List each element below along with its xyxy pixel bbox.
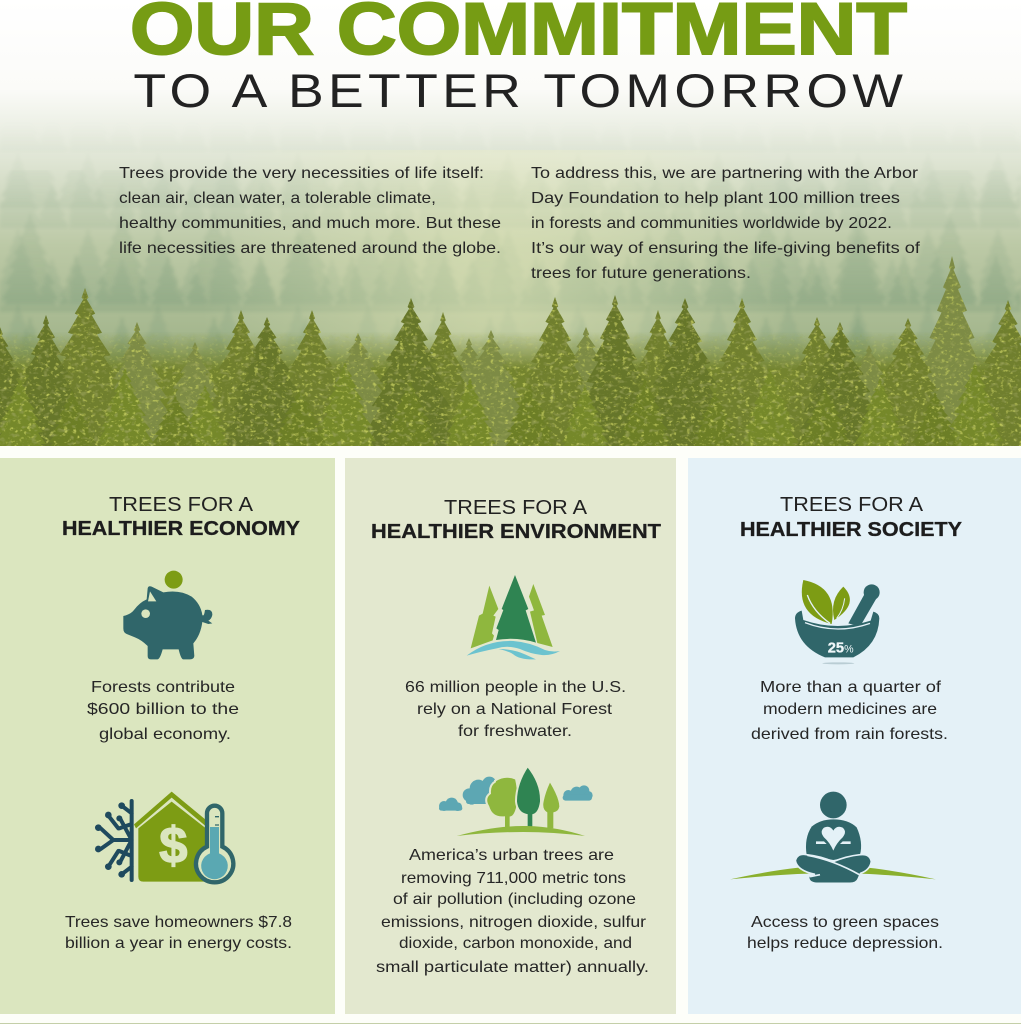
society text 2 <box>747 914 943 952</box>
economy heading: HEALTHIER ECONOMY <box>62 518 301 540</box>
icon: mortar and pestle <box>795 580 880 664</box>
environment heading: TREES FOR A <box>444 497 588 519</box>
intro text right: in forests and communities worldwide by 2022. <box>531 215 892 232</box>
economy text 1: $600 billion to the <box>87 701 239 718</box>
intro text right: To address this, we are partnering with the Arbor <box>531 165 918 182</box>
environment text 2 <box>376 847 649 976</box>
society text 2: Access to green spaces <box>751 914 939 931</box>
intro text right: Day Foundation to help plant 100 million trees <box>531 190 900 207</box>
environment text 2: emissions, nitrogen dioxide, sulfur <box>381 914 646 931</box>
environment text 2: of air pollution (including ozone <box>393 891 636 908</box>
environment heading <box>371 497 661 543</box>
environment text 1: for freshwater. <box>458 723 572 740</box>
society text 1: modern medicines are <box>763 701 937 718</box>
intro text left: Trees provide the very necessities of life itself: <box>119 165 484 182</box>
society text 1 <box>751 679 948 743</box>
intro text right: It’s our way of ensuring the life-giving benefits of <box>531 240 921 257</box>
bottom rule <box>0 1023 1021 1024</box>
society text 1: derived from rain forests. <box>751 726 948 743</box>
subtitle: TO A BETTER TOMORROW <box>133 64 903 117</box>
intro text right: trees for future generations. <box>531 265 751 282</box>
society heading: HEALTHIER SOCIETY <box>740 519 963 541</box>
panel: environment <box>345 458 676 1014</box>
intro text left: healthy communities, and much more. But these <box>119 215 501 232</box>
icon: house with snowflake and thermometer: $ <box>159 816 187 873</box>
icon: forest and river <box>467 575 560 659</box>
hero forest photo <box>0 103 1021 446</box>
economy text 1: Forests contribute <box>91 679 235 696</box>
economy text 2: billion a year in energy costs. <box>65 935 292 952</box>
environment text 2: America’s urban trees are <box>409 847 614 864</box>
economy heading <box>62 494 301 540</box>
society text 1: More than a quarter of <box>760 679 942 696</box>
intro text left <box>119 165 501 257</box>
icon: urban trees and clouds <box>439 766 593 836</box>
economy text 1 <box>87 679 239 743</box>
icon: piggy bank <box>123 571 212 659</box>
icon: mortar and pestle: 25% <box>828 640 854 656</box>
economy text 2: Trees save homeowners $7.8 <box>65 914 292 931</box>
environment text 1 <box>405 679 626 740</box>
environment text 2: removing 711,000 metric tons <box>401 870 626 887</box>
panel: economy <box>0 458 335 1014</box>
environment text 1: rely on a National Forest <box>417 701 613 718</box>
environment text 2: dioxide, carbon monoxide, and <box>399 935 632 952</box>
environment text 2: small particulate matter) annually. <box>376 959 649 976</box>
title <box>130 0 907 117</box>
society heading: TREES FOR A <box>780 494 924 516</box>
environment text 1: 66 million people in the U.S. <box>405 679 626 696</box>
intro text right <box>531 165 921 282</box>
economy heading: TREES FOR A <box>109 494 254 516</box>
icon: meditating figure with heart <box>730 792 936 883</box>
intro text left: clean air, clean water, a tolerable climate, <box>119 190 436 207</box>
economy text 2 <box>65 914 292 952</box>
icon: house with snowflake and thermometer <box>95 792 233 882</box>
panel: society <box>688 458 1021 1014</box>
society text 2: helps reduce depression. <box>747 935 943 952</box>
economy text 1: global economy. <box>99 726 231 743</box>
intro text left: life necessities are threatened around the globe. <box>119 240 501 257</box>
society heading <box>740 494 963 541</box>
environment heading: HEALTHIER ENVIRONMENT <box>371 521 661 543</box>
